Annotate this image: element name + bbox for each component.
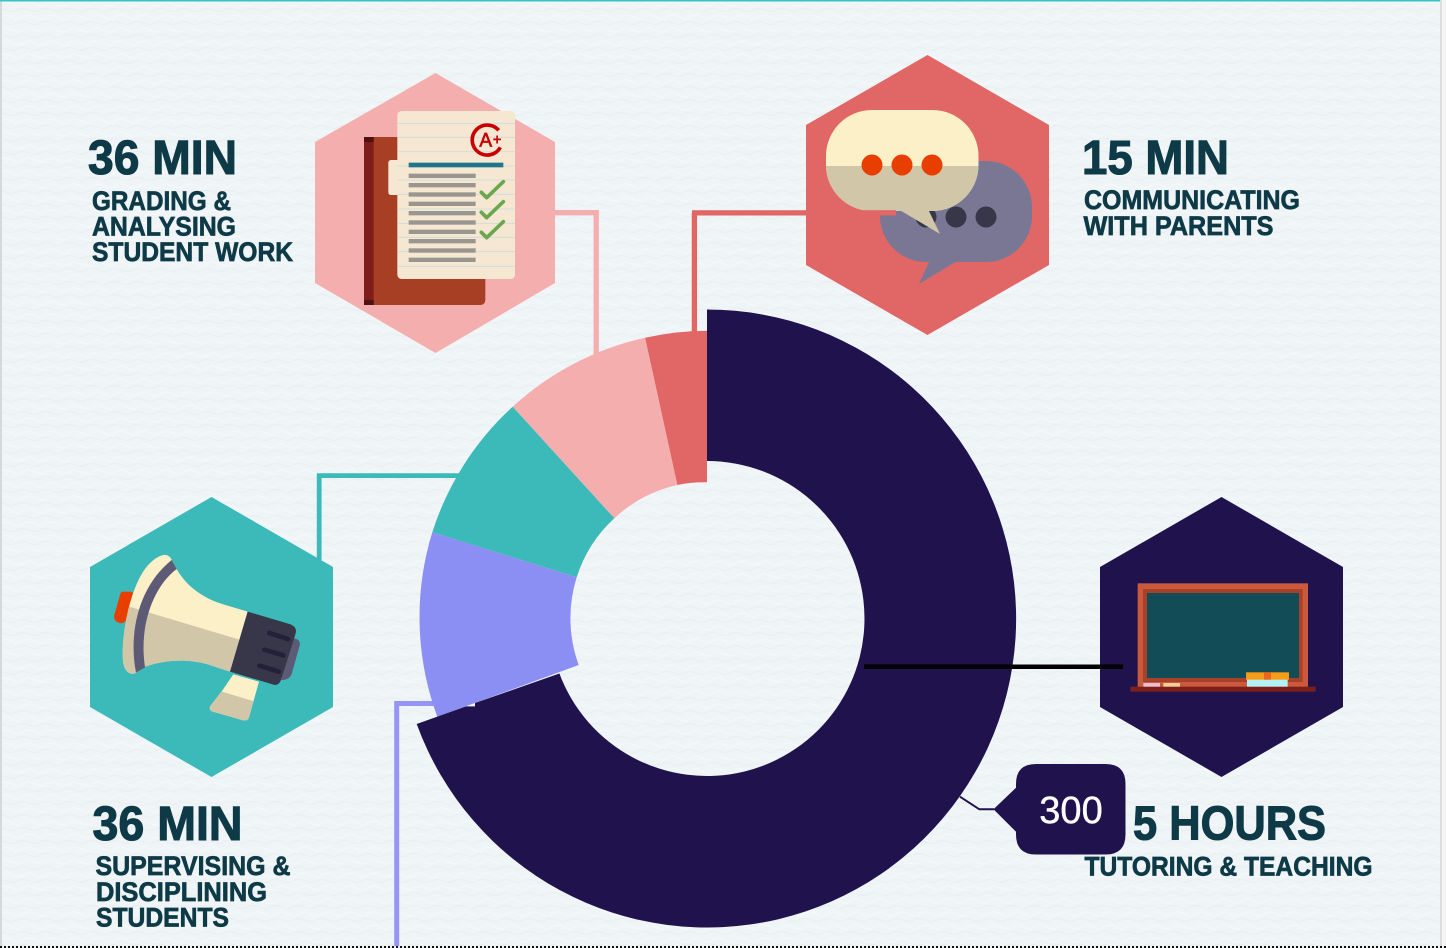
hexagon: grading [315,73,555,353]
text block: supervising: 36 MIN [92,798,242,851]
segment: purple [420,532,579,717]
text block: grading [88,132,293,267]
hexagon: supervising [90,497,333,777]
connector: chart to blackboard [864,664,1123,669]
text block: supervising: SUPERVISING & [96,851,290,881]
icon: book and graded paper: + [493,131,502,148]
text block: parents: WITH PARENTS [1084,211,1274,241]
segment: grading [513,338,677,518]
hexagon: tutoring and teaching [1100,497,1343,777]
connector: grading [555,213,596,355]
icon: megaphone [114,555,300,721]
text block: parents: 15 MIN [1082,132,1229,185]
text block: parents: COMMUNICATING [1084,185,1300,215]
text block: grading: STUDENT WORK [92,237,293,267]
connector: parents vertical [692,213,697,335]
text block: supervising: DISCIPLINING [96,877,267,907]
text block: grading: GRADING & [92,186,231,216]
connector: parents horizontal [692,210,896,216]
connector: supervising [319,476,462,560]
icon: front speech bubble [826,110,978,234]
text block: tutoring and teaching: TUTORING & TEACHING [1084,852,1372,882]
icon: blackboard [1130,583,1316,692]
segment: supervising [432,407,614,577]
icon: book and graded paper [364,111,515,305]
icon: back speech bubble [880,161,1032,284]
text block: tutoring and teaching: 5 HOURS [1133,798,1326,850]
connector: tutoring side [397,704,445,946]
icon: book and graded paper: A [479,131,492,152]
text block: parents [1082,132,1300,241]
text block: supervising: STUDENTS [96,903,229,933]
text block: supervising [92,798,290,933]
hexagon: communicating with parents [692,55,1049,335]
text block: grading: 36 MIN [88,132,237,185]
callout: 300 [960,764,1126,854]
callout: 300: 300 [1039,790,1103,832]
text block: grading: ANALYSING [92,212,236,242]
segment: tutoring and teaching [417,309,1016,927]
text block: tutoring and teaching [1084,798,1372,882]
segment: communicating with parents [645,331,707,485]
donut chart [417,309,1016,927]
